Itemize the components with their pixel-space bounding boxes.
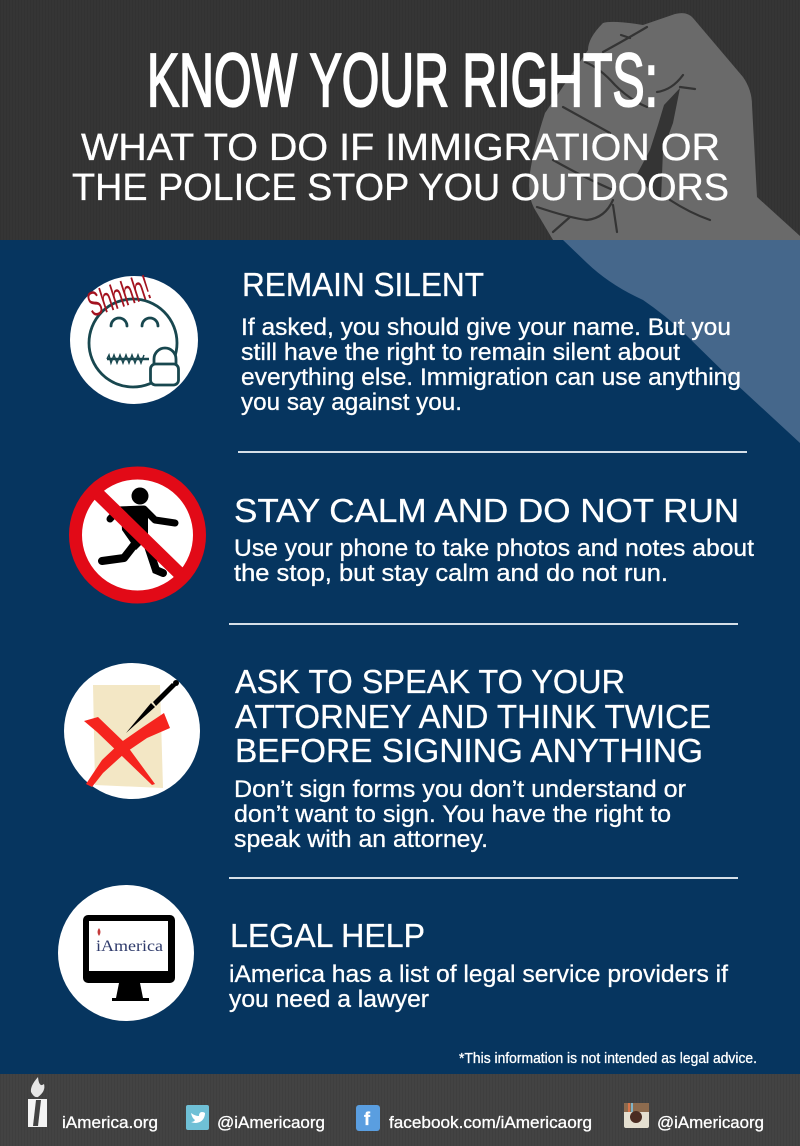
panel: header background [0,0,800,240]
heading: ask to speak: ATTORNEY AND THINK TWICE [235,698,711,735]
heading: ask to speak: BEFORE SIGNING ANYTHING [235,732,703,769]
subtitle: WHAT TO DO IF IMMIGRATION OR [81,127,720,169]
icon: raised fist [529,13,800,240]
text block: remain silent: you say against you. [241,389,462,416]
text block: stay calm: the stop, but stay calm and do not run. [234,560,668,587]
heading: remain silent: REMAIN SILENT [242,266,484,303]
link: facebook: facebook.com/iAmericaorg [389,1113,592,1132]
icon: instagram [624,1103,649,1128]
text block: legal help: iAmerica has a list of legal service providers if [229,961,728,988]
heading: ask to speak: ASK TO SPEAK TO YOUR [235,663,625,700]
text block: signing: speak with an attorney. [234,826,488,853]
text block: signing [234,776,686,853]
panel: main blue background [0,240,800,1075]
heading: ask to speak [235,663,711,769]
icon: facebook [356,1105,380,1131]
text block: remain silent: still have the right to remain silent about [241,339,680,366]
icon: iAmerica torch logo [28,1077,47,1127]
icon: computer monitor [58,885,194,1021]
text block: legal help: you need a lawyer [229,986,429,1013]
panel: footer [0,1074,800,1146]
light beam shape [563,240,800,443]
link: twitter: @iAmericaorg [217,1113,325,1132]
text block: signing: don’t want to sign. You have the right to [234,801,671,828]
text block: remain silent: everything else. Immigration can use anything [241,364,741,391]
disclaimer: *This information is not intended as legal advice. [459,1050,757,1067]
icon: paper with pen and cross [64,663,200,799]
text block: stay calm: Use your phone to take photos and notes about [234,535,754,562]
link: website: iAmerica.org [62,1113,158,1132]
icon: twitter [186,1105,209,1130]
icon: silent face: Shhhh! [82,268,155,325]
text block: signing: Don’t sign forms you don’t understand or [234,776,686,803]
link: instagram: @iAmericaorg [657,1113,764,1132]
heading: stay calm: STAY CALM AND DO NOT RUN [234,492,739,529]
text block: legal help [229,961,728,1013]
icon: no running [76,473,200,597]
text block: remain silent: If asked, you should give your name. But you [241,314,731,341]
subtitle: THE POLICE STOP YOU OUTDOORS [72,167,729,209]
icon: facebook: f [364,1109,371,1129]
icon: silent face [70,268,198,404]
text block: remain silent [241,314,741,416]
subtitle [72,127,729,209]
text block: stay calm [234,535,754,587]
heading: legal help: LEGAL HELP [230,917,425,954]
icon: computer monitor: iAmerica [96,938,163,955]
